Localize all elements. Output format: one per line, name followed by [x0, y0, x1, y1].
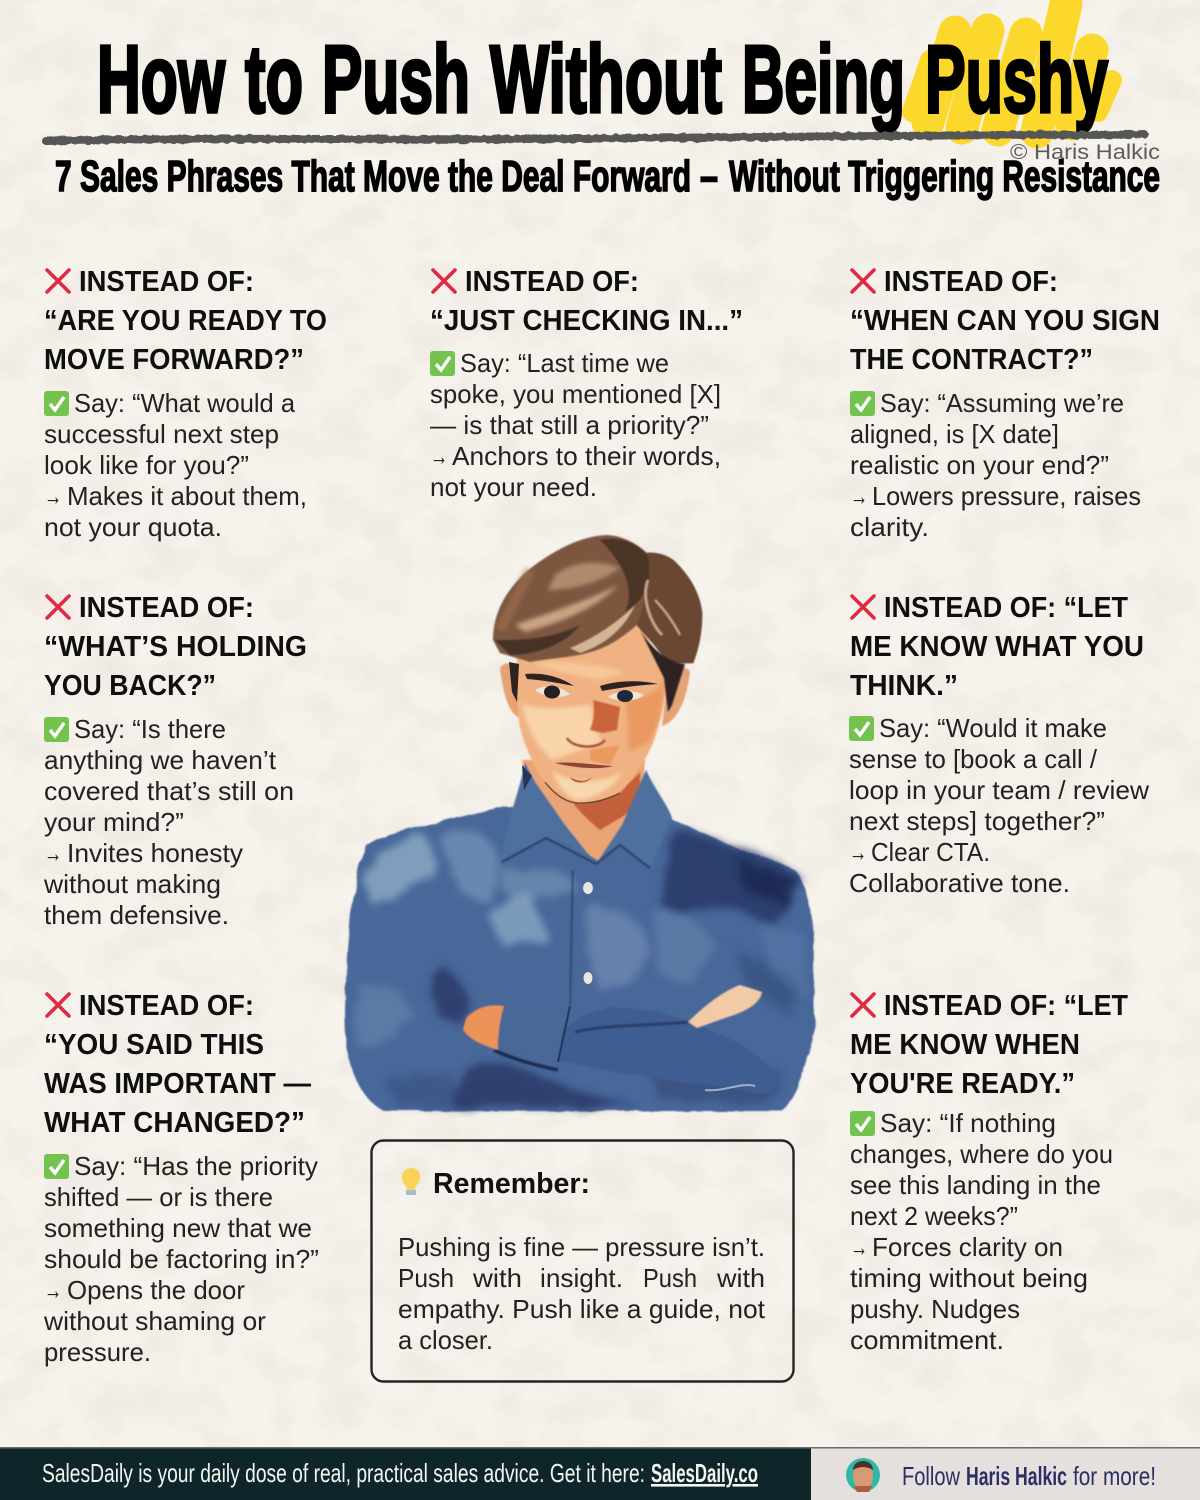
subtitle: 7 Sales Phrases That Move the Deal Forward [55, 152, 691, 201]
shirt placket and buttons [570, 870, 593, 1005]
subtitle: – [700, 152, 718, 201]
heading: INSTEAD OF: [79, 592, 254, 624]
icon: red cross [852, 596, 874, 618]
body text: — is that still a priority?” [430, 410, 709, 440]
icon: red cross [47, 596, 69, 618]
callout body [398, 1232, 766, 1355]
body text: successful next step [44, 419, 279, 449]
title: Without [490, 26, 722, 133]
facial features [525, 674, 658, 803]
footer bar [0, 1447, 1200, 1500]
heading: INSTEAD OF: [79, 990, 254, 1022]
body text: next steps] together?” [849, 806, 1105, 836]
heading [430, 266, 743, 337]
heading: “WHAT’S HOLDING [44, 631, 307, 663]
body text: spoke, you mentioned [X] [430, 379, 721, 409]
heading: THE CONTRACT?” [850, 344, 1093, 376]
body text [43, 1151, 319, 1367]
shirt light washes [352, 830, 805, 1050]
body text: them defensive. [44, 900, 229, 930]
shirt body [345, 806, 815, 1111]
body text: Lowers pressure, raises [872, 481, 1141, 511]
icon: light bulb [402, 1168, 420, 1195]
callout body: Push [398, 1263, 454, 1293]
body text [849, 713, 1149, 898]
callout body: empathy. Push like a guide, not [398, 1294, 766, 1324]
icon: red cross [852, 270, 874, 292]
callout body: Pushing is fine — pressure isn’t. [398, 1232, 765, 1262]
footer promo text: SalesDaily is your daily dose of real, practical sales advice. Get it here: [42, 1458, 645, 1488]
heading: “JUST CHECKING IN...” [430, 305, 743, 337]
callout heading: Remember: [433, 1168, 590, 1200]
callout body: with [716, 1263, 765, 1293]
heading: INSTEAD OF: “LET [884, 592, 1129, 624]
panel: let me know what you think [849, 592, 1149, 898]
body text: Say: “Has the priority [74, 1151, 318, 1181]
body text: without making [43, 869, 221, 899]
illustration: man with crossed arms [345, 535, 815, 1111]
body text: pressure. [44, 1337, 151, 1367]
heading: ME KNOW WHAT YOU [850, 631, 1144, 663]
follow text: Follow [902, 1461, 960, 1491]
icon: green check [850, 391, 875, 416]
body text: without shaming or [43, 1306, 266, 1336]
body text [430, 348, 721, 502]
heading: “ARE YOU READY TO [44, 305, 327, 337]
heading: WAS IMPORTANT — [44, 1068, 311, 1100]
body text: → [850, 1232, 868, 1262]
body text: Collaborative tone. [849, 868, 1070, 898]
heading: ME KNOW WHEN [850, 1029, 1080, 1061]
heading [44, 990, 311, 1139]
collar [502, 763, 672, 868]
heading: YOU'RE READY.” [850, 1068, 1075, 1100]
panel: are you ready to move forward [44, 266, 327, 542]
neck shadow [573, 772, 640, 830]
body text: see this landing in the [850, 1170, 1101, 1200]
neck [522, 760, 645, 862]
body text [850, 388, 1141, 542]
heading [850, 990, 1129, 1100]
body text: → [850, 481, 868, 511]
body text: should be factoring in?” [44, 1244, 319, 1274]
remember callout box [372, 1140, 794, 1382]
body text: shifted — or is there [44, 1182, 273, 1212]
follow text: Haris Halkic [966, 1461, 1067, 1491]
title: Being [742, 26, 905, 133]
body text: clarity. [850, 512, 929, 542]
left fist [463, 1005, 504, 1050]
body text: commitment. [850, 1325, 1004, 1355]
callout body: with [472, 1263, 522, 1293]
body text: loop in your team / review [849, 775, 1149, 805]
body text [43, 714, 294, 930]
shirt dark shading [385, 827, 800, 1108]
body text: your mind?” [44, 807, 184, 837]
heading [850, 266, 1160, 376]
title [97, 26, 1108, 133]
body text: Clear CTA. [871, 837, 990, 867]
icon: red cross [433, 270, 455, 292]
icon: green check [430, 351, 455, 376]
hair [493, 535, 702, 712]
title: to [245, 26, 303, 133]
heading: WHAT CHANGED?” [44, 1107, 305, 1139]
body text: sense to [book a call / [849, 744, 1098, 774]
panel: when can you sign the contract [850, 266, 1160, 542]
heading [850, 592, 1144, 702]
follow text: for more! [1073, 1461, 1156, 1491]
heading: YOU BACK?” [44, 670, 216, 702]
heading: “YOU SAID THIS [44, 1029, 264, 1061]
body text: Say: “Is there [74, 714, 226, 744]
face [517, 620, 667, 803]
body text: anything we haven’t [44, 745, 277, 775]
panel: what's holding you back [43, 592, 307, 930]
icon: green check [44, 391, 69, 416]
body text [44, 388, 307, 542]
callout body: Push [643, 1263, 697, 1293]
panel: just checking in [430, 266, 743, 502]
body text: → [44, 838, 62, 868]
callout body: insight. [540, 1263, 623, 1293]
body text: Say: “What would a [74, 388, 296, 418]
heading: INSTEAD OF: “LET [884, 990, 1129, 1022]
face light and shadow [522, 662, 664, 800]
body text [850, 1108, 1113, 1355]
body text: Forces clarity on [872, 1232, 1063, 1262]
body text: Say: “Last time we [460, 348, 669, 378]
shirt deep navy accent [740, 860, 797, 905]
icon: green check [850, 1111, 875, 1136]
body text: not your quota. [44, 512, 222, 542]
icon: green check [44, 1154, 69, 1179]
brush divider line [46, 134, 1144, 141]
follow text [902, 1461, 1156, 1491]
body text: → [849, 837, 867, 867]
body text: Say: “If nothing [880, 1108, 1056, 1138]
heading [44, 266, 327, 376]
right hand [688, 985, 762, 1028]
body text: next 2 weeks?” [850, 1201, 1018, 1231]
body text: look like for you?” [44, 450, 249, 480]
icon: red cross [47, 270, 69, 292]
heading: MOVE FORWARD?” [44, 344, 304, 376]
heading: INSTEAD OF: [884, 266, 1058, 298]
icon: red cross [852, 994, 874, 1016]
body text: Say: “Would it make [879, 713, 1107, 743]
panel: let me know when you're ready [850, 990, 1129, 1355]
heading [44, 592, 307, 702]
avatar [846, 1458, 880, 1492]
icon: red cross [47, 994, 69, 1016]
panel: you said this was important [43, 990, 319, 1367]
body text: not your need. [430, 472, 597, 502]
body text: Invites honesty [67, 838, 243, 868]
callout body: a closer. [398, 1325, 493, 1355]
yellow highlight scribble [912, 0, 1112, 132]
heading: INSTEAD OF: [79, 266, 254, 298]
body text: timing without being [850, 1263, 1088, 1293]
body text: → [44, 481, 62, 511]
title: How [97, 26, 225, 133]
heading: “WHEN CAN YOU SIGN [850, 305, 1160, 337]
body text: Anchors to their words, [452, 441, 721, 471]
crossed forearms [492, 1006, 778, 1095]
heading: INSTEAD OF: [465, 266, 639, 298]
body text: aligned, is [X date] [850, 419, 1059, 449]
body text: Opens the door [67, 1275, 245, 1305]
icon: green check [44, 717, 69, 742]
copyright credit: © Haris Halkic [1010, 141, 1160, 164]
ears [500, 664, 690, 726]
footer promo text: SalesDaily.co [651, 1458, 758, 1488]
body text: realistic on your end?” [850, 450, 1109, 480]
body text: covered that’s still on [44, 776, 294, 806]
icon: green check [849, 716, 874, 741]
heading: THINK.” [850, 670, 958, 702]
body text: changes, where do you [850, 1139, 1113, 1169]
title: Push [322, 26, 470, 133]
body text: Say: “Assuming we’re [880, 388, 1124, 418]
body text: → [430, 441, 448, 471]
body text: Makes it about them, [67, 481, 307, 511]
body text: something new that we [44, 1213, 312, 1243]
body text: → [44, 1275, 62, 1305]
body text: pushy. Nudges [850, 1294, 1020, 1324]
